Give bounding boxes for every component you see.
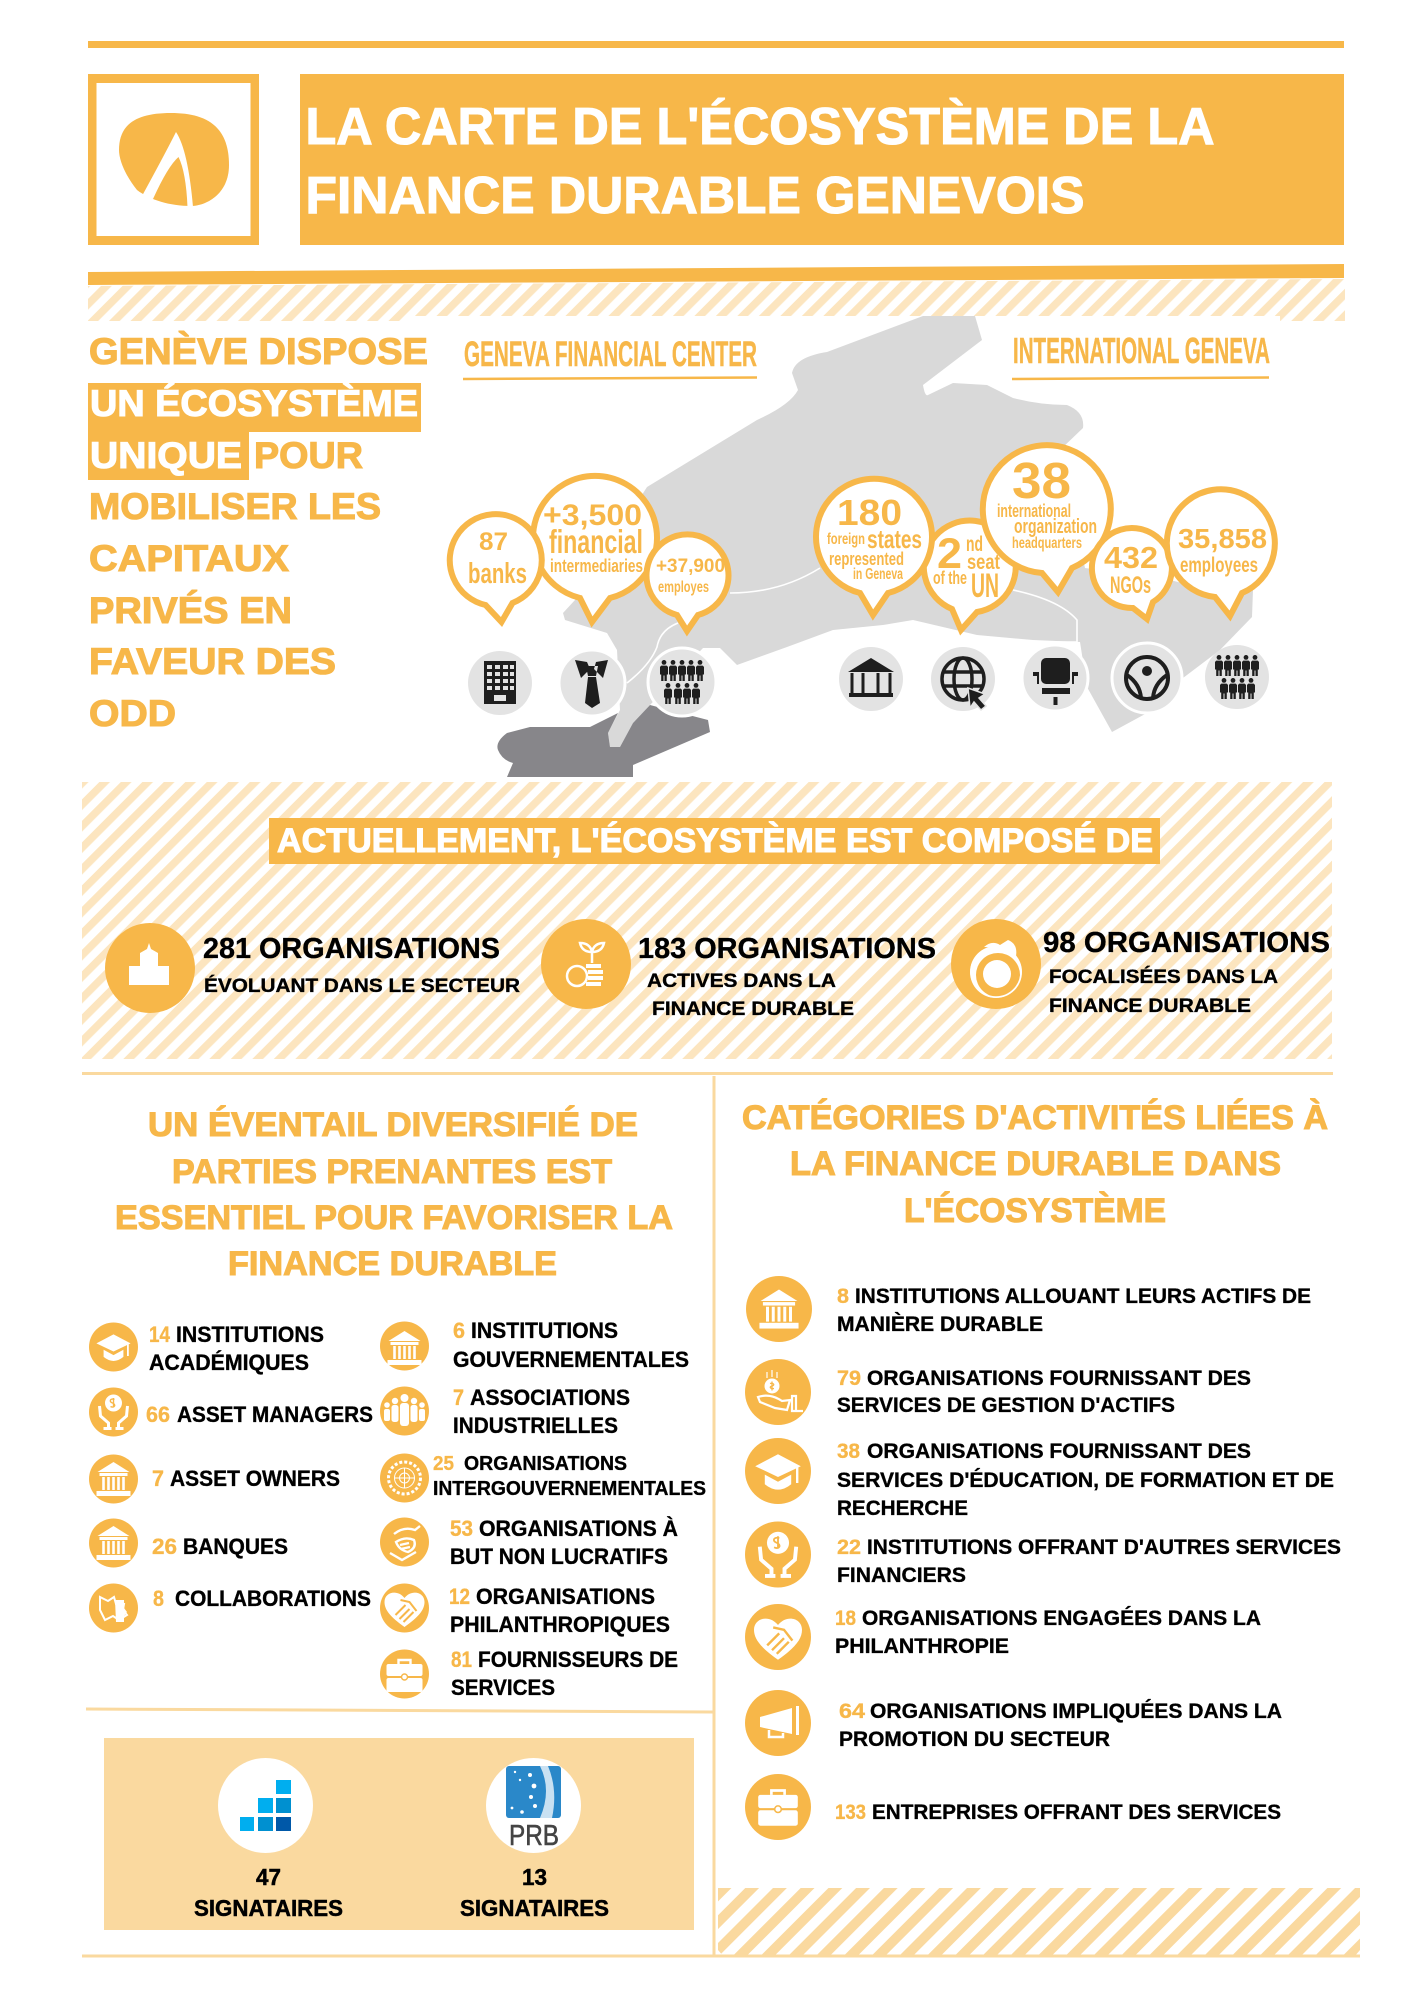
stat: 281 organisations [105, 923, 520, 1013]
callout: 432 NGOs [1092, 528, 1172, 619]
activity: éducation [745, 1438, 1334, 1520]
callout: +3,500 financial intermediaries: financial [549, 523, 643, 560]
callout: 180 foreign states: foreign [827, 531, 865, 548]
heading: left statement [88, 331, 428, 734]
activity: entreprises: ENTREPRISES OFFRANT DES SERVICES [872, 1800, 1281, 1824]
icon: globe with cursor [931, 647, 995, 711]
stakeholder: associations industrielles: 7 [453, 1385, 464, 1410]
activity: philanthropie: PHILANTHROPIE [835, 1634, 1009, 1658]
activity: institutions allouant: INSTITUTIONS ALLOUANT LEURS ACTIFS DE [855, 1284, 1311, 1308]
heading: stakeholders: FINANCE DURABLE [228, 1245, 557, 1283]
stakeholder: fournisseurs de services [380, 1647, 678, 1700]
callout: 35,858 employees [1167, 489, 1275, 616]
activity: services financiers: 22 [837, 1535, 861, 1559]
callout: 2nd seat of the UN: of the [933, 568, 967, 588]
callout: 180 foreign states: 180 [837, 492, 902, 533]
heading: left statement: MOBILISER LES [89, 486, 381, 527]
panel: signataires [104, 1738, 694, 1930]
activity: entreprises: 133 [835, 1800, 866, 1824]
heading: left statement: CAPITAUX [89, 538, 289, 579]
stat: 98 organisations: FINANCE DURABLE [1049, 996, 1251, 1017]
stat: 13 signataires [460, 1864, 609, 1921]
activity: promotion: ORGANISATIONS IMPLIQUÉES DANS LA [870, 1698, 1282, 1723]
stakeholder: institutions académiques: INSTITUTIONS [176, 1322, 324, 1347]
callout: 432 NGOs: NGOs [1110, 572, 1151, 599]
icon: logo mark [119, 113, 229, 207]
stakeholder: fournisseurs de services: 81 [451, 1647, 472, 1672]
stat: 47 signataires: SIGNATAIRES [194, 1895, 343, 1921]
heading: activity categories: CATÉGORIES D'ACTIVITÉS LIÉES À [742, 1099, 1328, 1137]
stat: 183 organisations [541, 919, 936, 1020]
heading: left statement: UNIQUE [90, 435, 242, 476]
logo: signatories 1 [218, 1758, 313, 1853]
activity: institutions allouant: MANIÈRE DURABLE [837, 1311, 1043, 1336]
stat: 183 organisations: ACTIVES DANS LA [647, 971, 836, 992]
callout: +37,900 employes: +37,900 [656, 556, 725, 577]
callout: 2nd seat of the UN [924, 521, 1016, 630]
callout: 2nd seat of the UN: 2 [937, 530, 962, 578]
stakeholder: asset managers: ASSET MANAGERS [177, 1402, 373, 1427]
callout: 2nd seat of the UN: UN [971, 567, 999, 605]
stat: 183 organisations: FINANCE DURABLE [652, 999, 854, 1020]
stakeholder: banques [89, 1518, 288, 1568]
activity: services financiers: FINANCIERS [837, 1563, 966, 1587]
panel: ecosystem composition [82, 782, 1332, 1059]
callout: 38 international organization headquarters: organization [1014, 516, 1097, 538]
logo: PRB [486, 1758, 581, 1853]
heading: stakeholders: PARTIES PRENANTES EST [172, 1153, 612, 1191]
stat: 13 signataires: SIGNATAIRES [460, 1895, 609, 1921]
icon: office chair [1022, 645, 1088, 711]
stakeholder: organisations intergouvernementales: INTERGOUVERNEMENTALES [433, 1478, 706, 1500]
stakeholder: institutions gouvernementales: GOUVERNEMENTALES [453, 1347, 689, 1372]
stakeholder: asset owners [89, 1454, 340, 1504]
stakeholder: asset owners: 7 [152, 1466, 164, 1491]
stakeholder: associations industrielles: INDUSTRIELLES [453, 1413, 618, 1438]
stat: 281 organisations: ÉVOLUANT DANS LE SECTEUR [204, 975, 520, 997]
callout: 180 foreign states: in Geneva [853, 566, 903, 583]
stakeholder: organisations à but non lucratif: 53 [450, 1516, 473, 1541]
stakeholder: fournisseurs de services: FOURNISSEURS DE [478, 1647, 678, 1672]
title [300, 74, 1344, 245]
stakeholder: fournisseurs de services: SERVICES [451, 1675, 555, 1700]
stakeholder: collaborations [89, 1584, 371, 1632]
callout: 180 foreign states: states [867, 524, 922, 554]
callout: 2nd seat of the UN: seat [967, 551, 1000, 574]
stakeholder: collaborations: COLLABORATIONS [175, 1586, 371, 1611]
striped band [88, 279, 1345, 321]
stakeholder: institutions académiques [89, 1322, 324, 1375]
heading: activity categories: LA FINANCE DURABLE DANS [790, 1145, 1281, 1183]
activity: éducation: 38 [837, 1439, 860, 1463]
stakeholder: organisations à but non lucratif: BUT NON LUCRATIFS [450, 1544, 668, 1569]
stakeholder: organisations philanthropiques: ORGANISATIONS [476, 1584, 655, 1609]
top rule [88, 41, 1344, 48]
heading: activity categories: L'ÉCOSYSTÈME [904, 1192, 1166, 1230]
stakeholder: organisations philanthropiques [380, 1584, 670, 1637]
heading: stakeholders: ESSENTIEL POUR FAVORISER LA [115, 1199, 673, 1237]
stakeholder: organisations philanthropiques: 12 [449, 1584, 470, 1609]
callout: +37,900 employes [646, 534, 728, 631]
stat: 47 signataires: 47 [256, 1864, 281, 1890]
callout: 87 banks [450, 514, 542, 622]
heading: left statement: UN ÉCOSYSTÈME [90, 383, 418, 424]
icon: museum [839, 647, 903, 711]
heading: stakeholders: UN ÉVENTAIL DIVERSIFIÉ DE [148, 1106, 638, 1144]
stat: 98 organisations: FOCALISÉES DANS LA [1049, 966, 1278, 988]
activity: gestion d'actifs [745, 1359, 1251, 1425]
activity: philanthropie: 18 [835, 1606, 856, 1630]
activity: institutions allouant [746, 1276, 1311, 1342]
heading: activity categories [742, 1099, 1328, 1230]
stat: 47 signataires [194, 1864, 343, 1921]
stakeholder: institutions gouvernementales [380, 1318, 689, 1372]
title: LA CARTE DE L'ÉCOSYSTÈME DE LA [306, 98, 1214, 156]
activity: éducation: ORGANISATIONS FOURNISSANT DES [867, 1439, 1251, 1463]
callout: 2nd seat of the UN: nd [966, 533, 983, 556]
stakeholder: organisations à but non lucratif [380, 1516, 678, 1569]
activity: éducation: SERVICES D'ÉDUCATION, DE FORMATION ET DE [837, 1467, 1334, 1492]
stakeholder: asset managers [89, 1388, 373, 1436]
callout: 180 foreign states: represented [829, 549, 904, 569]
callout: +3,500 financial intermediaries [533, 476, 657, 622]
callout: 35,858 employees: 35,858 [1178, 523, 1267, 554]
icon: NGO ring [1112, 643, 1182, 713]
callout: +37,900 employes: employes [658, 579, 709, 596]
callout: +3,500 financial intermediaries: +3,500 [543, 499, 642, 532]
callout: 35,858 employees: employees [1180, 554, 1258, 577]
striped band bottom right [718, 1888, 1360, 1957]
callout: 38 international organization headquarters [983, 445, 1111, 592]
activity: éducation: RECHERCHE [837, 1496, 968, 1520]
stakeholder: collaborations: 8 [153, 1586, 164, 1611]
activity: services financiers: INSTITUTIONS OFFRANT D'AUTRES SERVICES [867, 1535, 1341, 1559]
heading: left statement: PRIVÉS EN [89, 590, 292, 631]
activity: institutions allouant: 8 [837, 1284, 849, 1308]
activity: promotion [745, 1690, 1282, 1756]
heading: left statement: ODD [89, 693, 176, 734]
stat: 98 organisations [951, 919, 1330, 1017]
icon: employees [648, 648, 716, 716]
stat: 98 organisations: 98 ORGANISATIONS [1043, 927, 1330, 959]
activity: gestion d'actifs: 79 [837, 1366, 861, 1390]
stakeholder: organisations philanthropiques: PHILANTHROPIQUES [450, 1612, 670, 1637]
callout: 38 international organization headquarters: 38 [1012, 452, 1071, 509]
callout: 87 banks: 87 [479, 528, 508, 556]
callout: +3,500 financial intermediaries: intermediaries [550, 556, 643, 576]
stakeholder: organisations intergouvernementales: 25 [433, 1453, 454, 1475]
stakeholder: asset managers: 66 [146, 1402, 170, 1427]
stat: 13 signataires: 13 [522, 1864, 547, 1890]
callout: 38 international organization headquarters: headquarters [1012, 535, 1082, 552]
activity: promotion: PROMOTION DU SECTEUR [839, 1727, 1110, 1751]
stat: 281 organisations: 281 ORGANISATIONS [203, 933, 500, 965]
map of Geneva [497, 316, 1253, 777]
logo: PRB: PRB [509, 1820, 559, 1852]
stat: 183 organisations: 183 ORGANISATIONS [638, 933, 936, 965]
stakeholder: organisations à but non lucratif: ORGANISATIONS À [479, 1516, 678, 1541]
stakeholder: banques: 26 [152, 1534, 177, 1559]
stakeholder: banques: BANQUES [183, 1534, 288, 1559]
title: FINANCE DURABLE GENEVOIS [306, 167, 1084, 225]
callout: 38 international organization headquarters: international [997, 501, 1071, 521]
callout: 87 banks: banks [468, 558, 527, 590]
heading: left statement: GENÈVE DISPOSE [89, 331, 428, 372]
activity: philanthropie: ORGANISATIONS ENGAGÉES DANS LA [862, 1605, 1261, 1630]
activity: philanthropie [745, 1604, 1261, 1670]
stakeholder: institutions académiques: 14 [149, 1322, 171, 1347]
slanted rule [88, 264, 1344, 285]
stakeholder: institutions académiques: ACADÉMIQUES [149, 1350, 309, 1375]
stakeholder: institutions gouvernementales: INSTITUTIONS [471, 1318, 618, 1343]
stakeholder: asset owners: ASSET OWNERS [170, 1466, 340, 1491]
heading: Geneva financial center: GENEVA FINANCIAL CENTER [464, 335, 757, 374]
stakeholder: associations industrielles: ASSOCIATIONS [470, 1385, 630, 1410]
stakeholder: organisations intergouvernementales [380, 1453, 706, 1502]
callout: 180 foreign states [816, 479, 932, 615]
activity: promotion: 64 [839, 1699, 865, 1723]
callout: 432 NGOs: 432 [1104, 540, 1158, 575]
stakeholder: institutions gouvernementales: 6 [453, 1318, 465, 1343]
activity: gestion d'actifs: ORGANISATIONS FOURNISSANT DES [867, 1366, 1251, 1390]
stakeholder: associations industrielles [380, 1385, 630, 1438]
icon: tie [559, 650, 625, 716]
icon: bank building [468, 651, 532, 715]
activity: gestion d'actifs: SERVICES DE GESTION D'ACTIFS [837, 1393, 1175, 1417]
activity: entreprises [745, 1774, 1281, 1840]
logo box [88, 74, 259, 245]
activity: services financiers [745, 1522, 1341, 1588]
icon: international employees [1205, 645, 1269, 709]
stakeholder: organisations intergouvernementales: ORGANISATIONS [464, 1453, 627, 1475]
heading: ecosystem composition: ACTUELLEMENT, L'ÉCOSYSTÈME EST COMPOSÉ DE [277, 822, 1153, 860]
heading: left statement: POUR [254, 435, 363, 476]
heading: stakeholders [115, 1106, 673, 1283]
heading: left statement: FAVEUR DES [89, 641, 336, 682]
